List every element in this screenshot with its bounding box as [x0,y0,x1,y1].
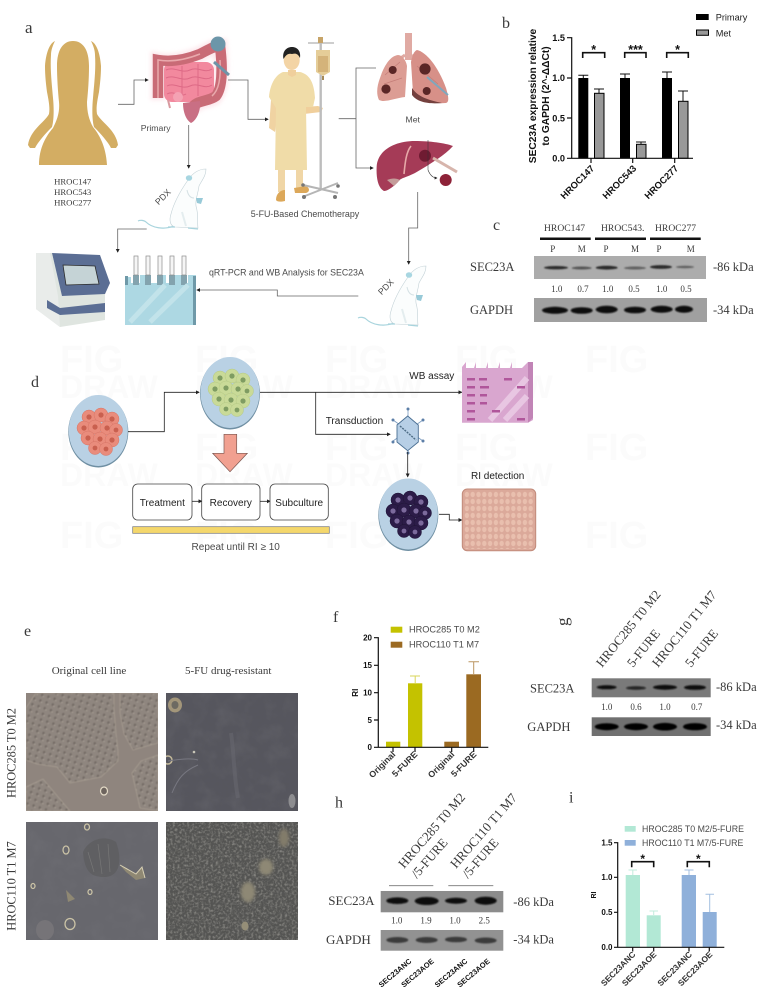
y tick labels: 1.0 [601,873,613,882]
panel f: RI bar chart [333,609,488,780]
legend [391,624,480,650]
protein labels: SEC23A [530,682,574,696]
panel letter h: h [335,795,343,812]
text: PDX metastasis: PDX [376,277,396,297]
x tick labels: HROC543 [600,163,638,201]
panel h: western blot [326,790,554,989]
blot: GAPDH [592,717,711,736]
rotated sample labels: HROC285 T0 M2 [593,587,664,670]
text: cohort names: HROC147 [54,176,92,186]
text: PDX: PDX [153,187,173,207]
text: FIG [195,339,258,381]
arrow: liver to PDX [409,192,418,264]
molecular weights: -34 kDa [713,303,754,317]
y tick labels: 0.0 [601,943,613,952]
protein labels: GAPDH [470,303,513,317]
axis title RI: RI [591,891,598,898]
row label: HROC110: HROC110 T1 M7 [4,841,18,931]
legend: Met [716,28,731,38]
axes [567,38,693,163]
y tick labels [552,33,565,164]
rotated sample labels: /5-FURE [459,835,502,881]
panel i: RI bar chart [569,790,744,988]
icon: colon [158,36,229,123]
micrograph: HROC285 resistant [166,693,298,811]
densitometry values [551,284,692,294]
y tick labels: 1.5 [601,838,613,848]
protein labels [326,893,375,947]
text: qRT-PCR analysis: qRT-PCR and WB Analysis for SEC23A [209,268,364,278]
rotated sample labels: HROC110 T1 M7 [649,587,720,670]
micrograph: HROC285 original [26,693,158,811]
text: DRAW [455,369,554,405]
icon: lungs with tumours [377,33,448,103]
box: Recovery [202,484,260,520]
x tick labels: Original [426,749,456,780]
y tick labels: 15 [363,661,373,670]
text: FIG [585,339,648,381]
panel letter e: e [24,623,31,640]
text: 5-FU chemotherapy: 5-FU-Based Chemotherapy [251,209,360,219]
text: FIG [455,427,518,469]
molecular weights: -86 kDa [513,895,554,909]
text: FIG [60,339,123,381]
panel e: micrographs [4,623,298,940]
text: DRAW [325,369,424,405]
panel a: clinical workflow [25,18,457,327]
legend: HROC285 T0 M2 [409,624,480,634]
densitometry values: 1.0 [656,284,668,294]
sample headers: HROC277 [655,223,696,234]
blot: GAPDH [534,298,707,322]
protein labels: GAPDH [326,932,371,947]
molecular weights: -86 kDa [716,680,757,694]
panel g: western blot [527,587,757,736]
panel c: western blot [470,217,754,322]
lane labels: SEC23ANC [377,956,414,989]
x tick labels: SEC23AOE [676,949,715,988]
molecular weights [713,260,754,317]
yellow repeat bar [133,527,329,533]
panel d: resistance workflow [31,357,536,553]
panel letter b: b [502,15,510,32]
bars [578,72,688,158]
lane labels: SEC23ANC [433,956,470,989]
axis title RI: RI [351,689,360,697]
column title: original: Original cell line [52,665,126,677]
column title: resistant: 5-FU drug-resistant [185,665,271,677]
arrow: dish 2 to transduction [316,392,390,434]
icon: patient with IV stand [269,37,340,202]
arrow: virus to transduced dish [407,452,409,477]
icon: patient silhouette [28,41,118,165]
y tick labels: 1.5 [552,33,565,43]
sample headers: HROC543. [601,223,644,234]
y tick labels: 0.5 [552,114,565,124]
row label: HROC285: HROC285 T0 M2 [4,708,18,798]
legend [625,824,744,848]
densitometry values: 0.7 [691,702,703,712]
rotated sample labels: HROC110 T1 M7 [447,790,520,871]
molecular weights: -34 kDa [513,932,554,946]
densitometry values [601,702,703,712]
axes [374,638,488,752]
lane labels: SEC23AOE [399,957,436,989]
error bars and bars [626,870,717,947]
blot: GAPDH [381,930,503,951]
icon: well plate [462,489,536,551]
y tick labels: 1.0 [552,73,565,83]
text: DRAW [195,369,294,405]
axes [614,843,724,952]
x tick labels [367,749,478,780]
box: Treatment: Treatment [140,498,185,509]
x tick labels: Original [367,749,397,780]
y tick labels: 0.5 [601,908,613,917]
legend [696,12,748,38]
text: FIG [585,427,648,469]
text: cohort names: HROC543 [54,187,91,197]
densitometry values: 1.9 [420,915,432,925]
arrow: primary to PDX [188,125,190,168]
box: Subculture: Subculture [275,498,324,509]
panel letter g: g [553,617,572,626]
significance brackets: * [640,852,645,866]
densitometry values: 1.0 [659,702,671,712]
icon: PCR machine [36,253,110,327]
x tick labels: SEC23ANC [599,949,637,988]
densitometry values: 0.5 [680,284,692,294]
densitometry values: 0.7 [577,284,589,294]
legend: HROC110 T1 M7 [409,640,479,650]
significance brackets: * [696,852,701,866]
x tick labels: SEC23ANC [655,949,694,988]
panel letter c: c [493,217,500,234]
significance brackets: * [591,43,596,57]
legend: Primary [716,12,748,22]
box: Subculture [270,484,328,520]
y tick labels: 10 [363,688,373,698]
legend: HROC110 T1 M7/5-FURE [642,838,743,848]
significance brackets: *** [628,43,643,57]
blot: SEC23A [592,678,711,697]
densitometry values: 1.0 [391,915,403,925]
text: FIG [325,515,388,557]
micrograph: HROC110 original [26,822,158,940]
y tick labels: 0 [368,743,373,752]
header bars [540,237,701,240]
significance brackets [632,852,709,867]
protein labels [470,260,514,317]
lane labels: M [687,244,695,254]
y tick labels: 20 [363,634,373,642]
densitometry values: 1.0 [601,702,613,712]
densitometry values: 1.0 [449,915,461,925]
arrow: dish 2 to WB assay [260,391,462,393]
text: FIG [195,515,258,557]
text: WB assay: WB assay [409,371,454,382]
x tick labels: 5-FURE [449,749,478,779]
error bars and bars [386,662,481,747]
icon: WB gel [462,362,533,423]
arrow: dish 1 to dish 2 [128,392,199,432]
icon: virus [392,408,424,454]
text: Transduction: Transduction [326,416,383,427]
y axis title: SEC23A expression relative [528,28,539,163]
text: FIG [195,427,258,469]
sample headers: HROC147 [544,223,585,234]
legend: HROC285 T0 M2/5-FURE [642,824,744,834]
text: cohort names: HROC277 [54,198,92,208]
lane labels: M [631,244,639,254]
x tick labels: 5-FURE [390,749,419,779]
x tick labels: HROC147 [558,163,596,201]
arrow: colon to patient [228,80,268,119]
molecular weights [513,895,554,946]
arrow: PDX to gel [197,290,358,296]
lane labels: P [603,244,609,254]
lane labels: P [550,244,555,254]
protein labels: SEC23A [328,893,375,908]
molecular weights: -86 kDa [713,260,754,274]
arrow: patient to primary [118,80,148,104]
arrow: recovery to subculture [260,500,270,502]
y tick labels [601,838,613,952]
densitometry values: 0.6 [630,702,642,712]
panel b: qPCR bar chart [502,12,748,201]
text: DRAW [195,457,294,493]
text: DRAW [325,457,424,493]
box: Recovery: Recovery [210,498,252,509]
text: DRAW [60,457,159,493]
text: FIG [585,515,648,557]
y tick labels: 5 [368,716,373,725]
panel letter a: a [25,18,33,37]
blot: SEC23A [534,256,706,279]
molecular weights: -34 kDa [716,718,757,732]
rotated sample labels: /5-FURE [408,835,451,881]
icon: dish green cells [200,357,260,430]
text: cohort names [54,176,92,208]
icon: dish red cells [68,395,128,468]
icon: gel tank [125,256,196,325]
micrograph: HROC110 resistant [166,822,298,940]
sample headers [544,223,696,234]
text: DRAW [455,457,554,493]
densitometry values: 0.5 [628,284,640,294]
molecular weights [716,680,757,732]
rotated sample labels: 5-FURE [682,626,721,670]
x tick labels: HROC277 [642,163,680,201]
significance brackets [583,43,688,58]
significance brackets: * [675,43,680,57]
arrow: mouse to sequencer [118,229,147,252]
rotated sample labels: 5-FURE [624,626,663,670]
box: Treatment [133,484,192,520]
panel letter d: d [31,374,39,391]
text: Met: Met [405,114,421,124]
arrow: large red down arrow [213,434,247,472]
protein labels: SEC23A [470,260,514,274]
blot: SEC23A [381,891,503,912]
icon: PDX mouse metastasis [358,266,426,326]
text: FIG [60,427,123,469]
text: FIG [325,427,388,469]
text: Primary: Primary [141,123,171,133]
rotated sample labels [395,790,520,881]
lane labels: SEC23AOE [455,957,492,989]
text: DRAW [60,369,159,405]
y axis title line 2: to GAPDH (2^-ΔΔCt) [541,46,552,146]
densitometry values: 1.0 [551,284,563,294]
text: RI detection: RI detection [471,471,524,482]
arrow: patient to metastases [339,68,376,168]
text: FIG [60,515,123,557]
densitometry values: 2.5 [479,915,490,925]
icon: PDX mouse primary [138,169,206,229]
text: repeat until RI: Repeat until RI ≥ 10 [192,542,280,553]
sample group lines [389,885,493,887]
densitometry values [391,915,490,925]
panel letter f: f [333,609,339,626]
protein labels [527,682,574,734]
rotated sample labels: HROC285 T0 M2 [395,790,468,871]
protein labels: GAPDH [527,720,570,734]
lane labels [550,244,695,254]
arrow: treatment to recovery [192,500,202,502]
y tick labels [363,634,373,752]
text: FIG [455,339,518,381]
densitometry values: 1.0 [602,284,614,294]
icon: dish purple cells [378,478,438,551]
panel letter i: i [569,790,574,807]
text: FIG [325,339,388,381]
arrow: dish to RI detection [439,514,462,520]
lane labels: M [578,244,586,254]
x tick labels [599,949,715,988]
lane labels: P [656,244,662,254]
lane labels [377,956,492,989]
x tick labels: SEC23AOE [620,949,659,988]
y tick labels: 0.0 [552,154,565,164]
rotated sample labels [593,587,721,670]
icon: liver with tumour [377,140,457,191]
x tick labels [558,163,680,201]
